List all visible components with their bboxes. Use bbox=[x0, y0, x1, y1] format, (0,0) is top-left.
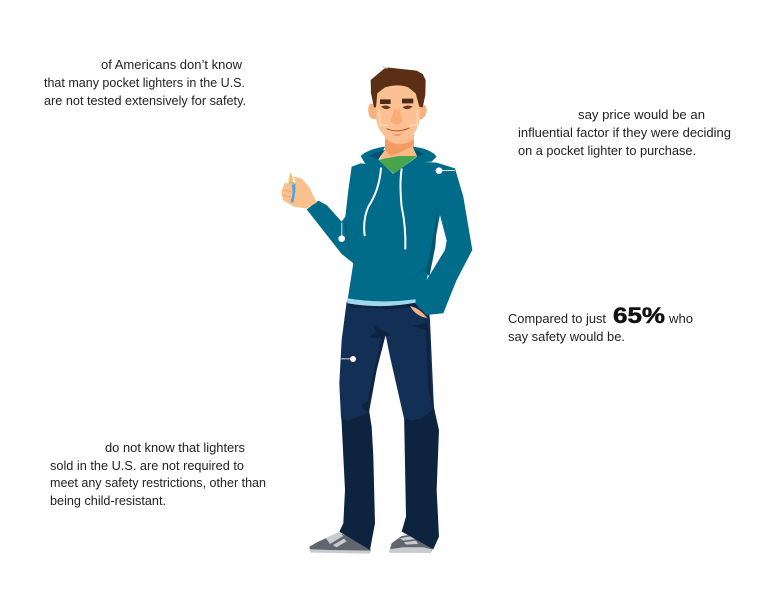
text block: safety comparison with 65%: say safety would be. bbox=[508, 329, 625, 344]
nose and mouth bbox=[391, 109, 403, 124]
text block: safety comparison with 65%: 65% bbox=[613, 303, 665, 328]
hood bbox=[361, 147, 437, 174]
hand in pocket bbox=[410, 306, 427, 318]
hair bbox=[371, 67, 426, 107]
text block: safety comparison with 65% bbox=[508, 303, 693, 344]
face highlight lines bbox=[379, 110, 417, 125]
neck bbox=[380, 133, 418, 165]
drawstrings bbox=[364, 168, 405, 249]
text block: bottom left statistic: sold in the U.S. are not required to bbox=[50, 458, 244, 473]
text block: top left statistic: are not tested extensively for safety. bbox=[44, 93, 246, 108]
connector: sleeve callout dot bbox=[338, 223, 345, 242]
text block: top right statistic: influential factor if they were deciding bbox=[518, 125, 731, 140]
text block: safety comparison with 65%: Compared to just bbox=[508, 311, 606, 326]
hoodie body bbox=[307, 162, 472, 315]
t-shirt collar bbox=[377, 156, 417, 174]
right shoe bbox=[389, 534, 433, 553]
jeans shadows bbox=[347, 303, 435, 413]
face bbox=[375, 82, 421, 143]
left shoe bbox=[309, 532, 371, 554]
eyes bbox=[381, 105, 413, 109]
text block: top right statistic bbox=[518, 107, 731, 158]
jeans upper bbox=[339, 302, 434, 421]
text block: top right statistic: say price would be an bbox=[578, 107, 705, 122]
lower body: jeans and shoes bbox=[309, 302, 439, 554]
white gap between arm and body bbox=[427, 215, 447, 280]
text block: safety comparison with 65%: who bbox=[668, 311, 693, 326]
text block: top right statistic: on a pocket lighter to purchase. bbox=[518, 143, 696, 158]
hoodie shadow folds bbox=[345, 205, 438, 291]
connector: shoulder callout dot bbox=[436, 167, 455, 174]
waistband bbox=[347, 298, 416, 306]
connector: leg callout dot bbox=[341, 356, 356, 362]
eyebrows bbox=[380, 99, 413, 104]
hand holding lighter bbox=[281, 173, 317, 209]
text block: top left statistic: of Americans don’t know bbox=[101, 57, 243, 72]
text block: bottom left statistic: do not know that lighters bbox=[105, 440, 245, 455]
text block: top left statistic bbox=[44, 57, 246, 108]
jeans lower dark part bbox=[339, 405, 439, 550]
upper body: head, hoodie, hand bbox=[281, 65, 472, 318]
text block: bottom left statistic bbox=[50, 440, 266, 508]
ears bbox=[368, 103, 427, 120]
text block: top left statistic: that many pocket lighters in the U.S. bbox=[44, 75, 245, 90]
text block: bottom left statistic: meet any safety restrictions, other than bbox=[50, 475, 266, 490]
illustration: man holding a lighter bbox=[281, 65, 472, 554]
text block: bottom left statistic: being child-resistant. bbox=[50, 493, 166, 508]
